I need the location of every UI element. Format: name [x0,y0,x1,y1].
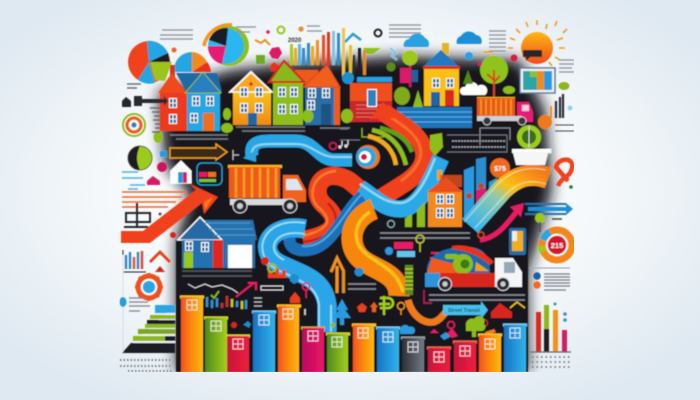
house: yellow [230,72,272,125]
price circle: $75 [494,166,506,173]
side stripes [127,84,160,132]
left orange stripes and symbol [122,192,186,228]
icon: pink house [147,176,160,185]
orange truck [228,165,306,213]
upward arrows and spruce [330,258,351,328]
orange outlined arrow [170,144,227,160]
blue house with garage [178,217,257,268]
flower and tiny icons [157,150,239,172]
bin 6 [301,326,325,372]
pie chart: large [128,41,172,84]
big orange lower ribbon [352,209,403,296]
bin 3 [226,334,250,372]
donut chart with 215 [541,230,572,260]
bin 11 [427,346,451,372]
blue right arrow [525,203,573,215]
red ribbon knot icon [556,160,573,189]
green shield icon [430,133,443,156]
pie charts cluster [128,25,249,84]
orange squiggle and blue arrow: Street Transit [448,308,480,314]
blue striped building [397,107,472,128]
gold ribbon arrow [464,169,548,228]
tree big round [480,56,508,98]
top bar chart [290,28,366,76]
house: green [269,61,322,125]
vertical stripe bar and rule lines [348,265,525,303]
house: dark blue with orange roof [303,65,340,125]
cab [283,175,306,202]
donut chart with 215: 215 [551,241,563,250]
target circle [356,145,380,169]
icon: white house outline [171,161,191,183]
house: red [158,65,187,131]
sun with speech bubble [508,20,567,66]
bin 7 [326,332,350,372]
pins and dots [465,52,518,66]
cargo load [427,245,494,274]
bin 8 [352,324,376,372]
upper right truck [477,97,533,125]
dark blue ribbon [289,194,362,250]
container [228,165,282,198]
pink arrow up [236,283,256,297]
red ribbon upper with arrow head [370,102,424,200]
icon: orange gear [135,273,163,301]
orange house centre right [427,170,463,227]
green and gold arcs [368,128,412,165]
lower left mini chart and house [123,232,176,272]
dark backdrop panel [158,56,552,372]
bin 2 [204,316,228,372]
circuit lines centre [340,128,510,152]
gray text band centre [380,233,470,238]
bin 9 [376,326,400,372]
cloud blue left [404,34,429,47]
music note icons [330,140,348,150]
long blue S ribbon [262,222,331,332]
bars [536,302,567,352]
icon: donut lime [128,146,152,170]
stepped triangle chart [120,255,175,371]
lower delivery truck [425,245,522,290]
clouds and trees upper right [386,31,518,107]
bin 12 [453,340,477,372]
pie chart: ring with orange arc [204,25,249,66]
wheels [438,278,510,290]
top blue ribbon with arrow [243,141,352,162]
icon: small house [122,97,131,107]
central light blue ribbon [360,158,441,209]
caption text lines and year [160,25,506,71]
white bathtub basket [512,125,551,165]
middle icons above bins [182,257,310,328]
bin 4 [252,310,276,372]
speech bubble [523,50,542,61]
tree top [402,50,418,87]
letter icon [357,296,404,315]
bin 14 [503,324,527,372]
row of five houses [154,61,353,143]
phone icon [509,228,526,255]
yellow house with blue roof [423,43,460,106]
brick building [341,72,392,123]
bed [425,273,495,287]
chassis [230,199,290,205]
pink arrow [478,203,524,240]
small coloured labels [385,235,455,258]
icon: chevron house [150,252,170,262]
tiny chart [207,296,246,309]
icon: target donut [123,114,145,136]
trees lower [386,62,515,107]
green lamp tree [535,213,562,232]
left icons and bullet [122,84,168,189]
large red arrow [121,184,218,243]
cloud white [460,82,487,95]
bin 13 [478,334,502,372]
icon: blue basket [197,163,222,185]
right caption text [559,60,574,72]
price circle [490,158,510,178]
right lower bar chart panel [530,268,571,367]
green bar pair [388,202,425,228]
cloud blue right [457,31,482,44]
house: blue with orange door [176,72,222,131]
icon: double arrow [134,96,168,106]
cab [495,258,522,287]
wheels [233,199,297,213]
caption text lines and year: 2020 [288,38,302,44]
road stripes under houses [170,127,350,139]
bin 5 [277,304,301,372]
pie chart: half hidden [174,52,211,72]
symbol [124,203,150,228]
red house and chevron [480,302,525,336]
right tree and mini chart [538,82,574,131]
icons between bins [400,316,485,340]
bin 1 [180,296,204,372]
bin 10 [401,336,425,372]
colour table panel [520,68,555,93]
trees by the houses [154,108,353,143]
orange squiggle and blue arrow [408,300,488,322]
central orange red S ribbon [303,171,361,242]
row of bins [180,296,527,372]
tall blue pink bars [464,157,497,217]
